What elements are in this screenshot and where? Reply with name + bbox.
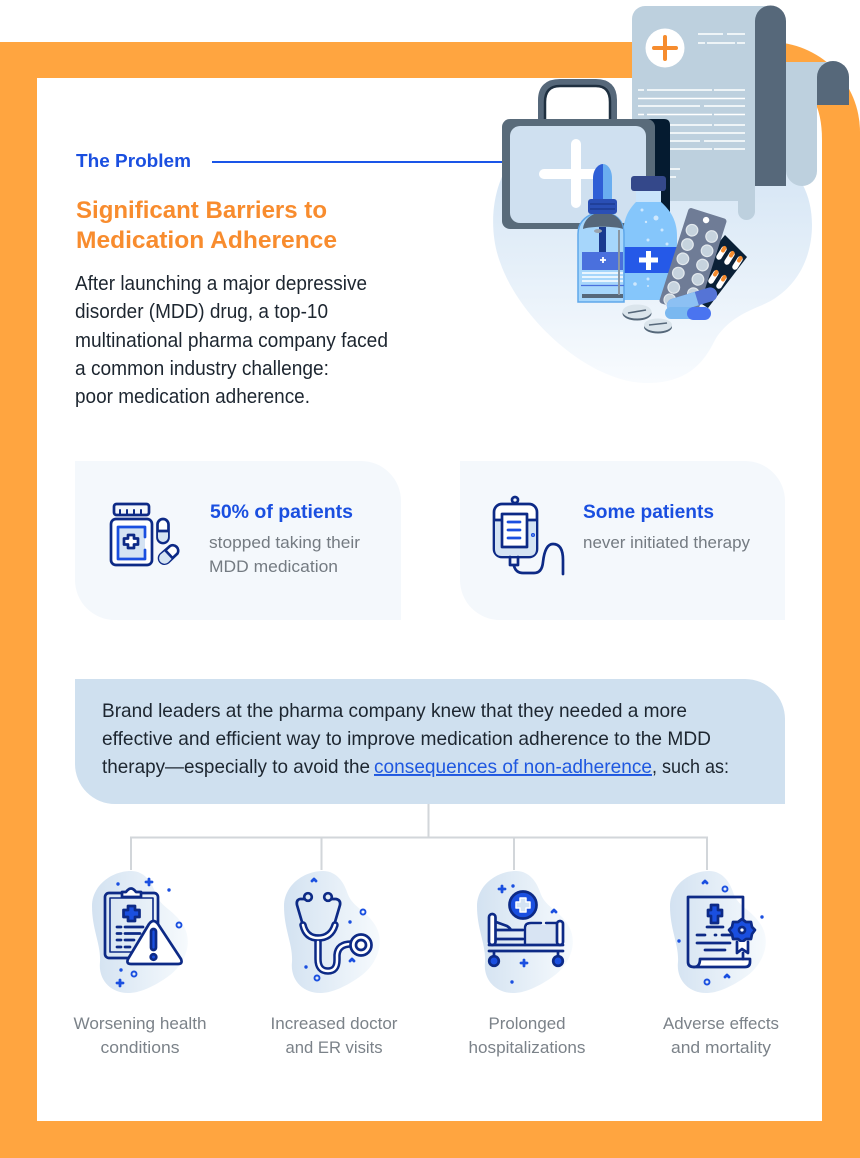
label <box>270 1014 398 1057</box>
label: Adverse effects <box>663 1014 779 1033</box>
prescription scroll <box>632 5 849 220</box>
intro paragraph: multinational pharma company faced <box>75 330 388 352</box>
blob <box>670 871 766 993</box>
label: conditions <box>100 1038 180 1057</box>
label: hospitalizations <box>468 1038 586 1057</box>
label: Prolonged <box>488 1014 566 1033</box>
consequence: worsening health conditions <box>74 871 206 1057</box>
icon: stethoscope <box>297 893 372 971</box>
label <box>74 1014 206 1057</box>
stat text <box>583 502 750 552</box>
callout text <box>102 700 729 778</box>
intro paragraph <box>75 273 388 408</box>
connector lines <box>131 804 707 870</box>
icon: death certificate with seal <box>688 897 755 967</box>
black blister pack <box>680 235 747 308</box>
callout text: therapy—especially to avoid the <box>102 756 370 778</box>
decorative marks <box>116 879 182 986</box>
dropper bottle <box>578 164 624 302</box>
decorative marks <box>499 884 556 984</box>
icon: IV drip bag <box>494 497 563 574</box>
stat card: 50% of patients <box>75 461 401 620</box>
stat card: some patients <box>460 461 785 620</box>
background blob <box>493 150 812 383</box>
first aid case <box>502 83 670 229</box>
stat text: Some patients <box>583 502 714 523</box>
heading: Medication Adherence <box>76 227 337 254</box>
blob <box>477 871 573 993</box>
heading: Significant Barriers to <box>76 197 327 224</box>
heading <box>76 197 337 254</box>
blob <box>92 871 188 993</box>
decorative marks <box>304 879 366 980</box>
label: Increased doctor <box>270 1014 398 1033</box>
grey blister pack <box>659 207 727 315</box>
intro paragraph: After launching a major depressive <box>75 273 367 295</box>
tablets <box>622 304 672 334</box>
stat text: MDD medication <box>209 557 338 576</box>
stat text <box>209 502 360 576</box>
intro paragraph: a common industry challenge: <box>75 358 329 380</box>
consequence: increased doctor and ER visits <box>270 871 398 1057</box>
medicine bottle <box>623 176 677 300</box>
stat text: stopped taking their <box>209 533 360 552</box>
callout text: Brand leaders at the pharma company knew that they needed a more <box>102 700 687 722</box>
capsules <box>665 286 719 320</box>
callout text: , such as: <box>652 756 729 778</box>
stat text: 50% of patients <box>210 502 353 523</box>
blob <box>284 871 380 993</box>
callout banner <box>75 679 785 804</box>
illustration: medical kit, scroll and medicines <box>493 5 849 383</box>
icon: clipboard with warning <box>105 888 182 964</box>
eyebrow: The Problem: The Problem <box>76 150 191 171</box>
stat text: never initiated therapy <box>583 533 750 552</box>
consequence: adverse effects and mortality <box>663 871 779 1057</box>
consequence: prolonged hospitalizations <box>468 871 586 1057</box>
icon: hospital bed <box>489 892 563 966</box>
label: and ER visits <box>286 1038 382 1057</box>
label <box>663 1014 779 1057</box>
intro paragraph: disorder (MDD) drug, a top-10 <box>75 301 328 323</box>
intro paragraph: poor medication adherence. <box>75 386 310 408</box>
label: Worsening health <box>74 1014 206 1033</box>
callout text: consequences of non-adherence <box>374 756 652 778</box>
label <box>468 1014 586 1057</box>
label: and mortality <box>671 1038 772 1057</box>
icon: medicine bottle and pills <box>111 504 178 565</box>
callout text: effective and efficient way to improve medication adherence to the MDD <box>102 728 711 750</box>
decorative marks <box>677 881 764 984</box>
